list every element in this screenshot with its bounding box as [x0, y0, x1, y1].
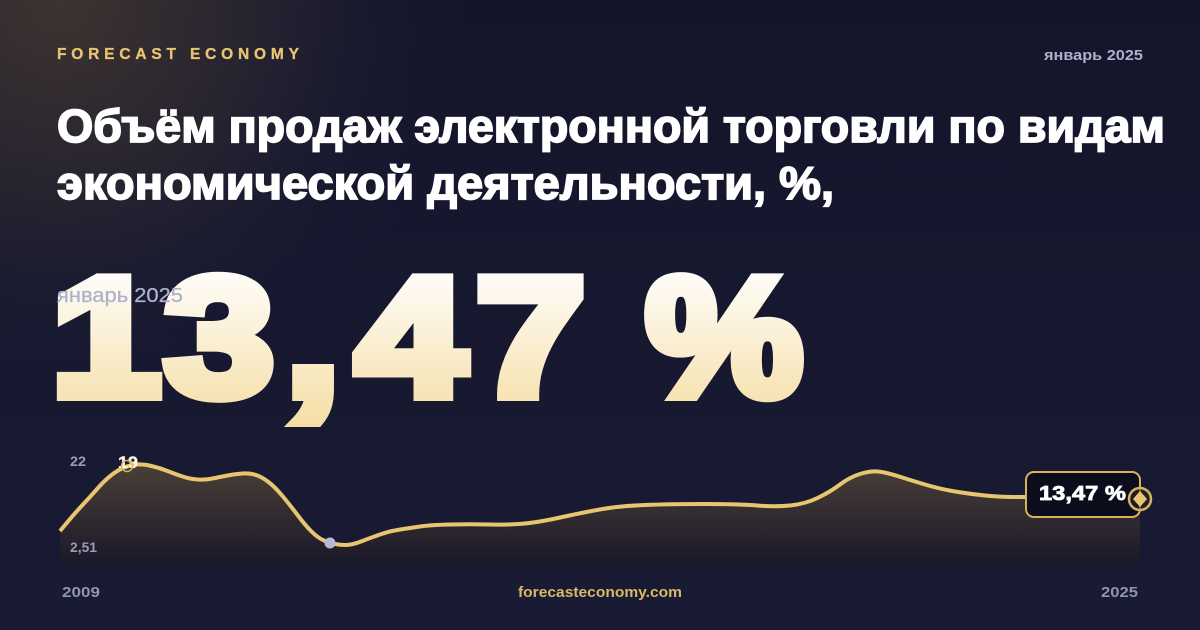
website: forecasteconomy.com [518, 585, 682, 601]
title: экономической деятельности, %, [57, 157, 834, 209]
date under title: январь 2025 [57, 285, 183, 307]
callout [1026, 472, 1140, 517]
title [57, 100, 1165, 209]
area under line [60, 464, 1140, 565]
end year: 2025 [1101, 585, 1138, 601]
start year: 2009 [62, 585, 100, 601]
line chart [60, 453, 1151, 565]
peak value: 19 [118, 453, 138, 472]
big value: % [646, 244, 802, 431]
peak marker [122, 460, 132, 472]
data line [60, 464, 1040, 545]
end marker [1129, 488, 1151, 510]
max label: 22 [70, 454, 86, 469]
big value: 13,47 [51, 242, 585, 431]
callout: 13,47 % [1039, 482, 1126, 505]
brand label: FORECAST ECONOMY [57, 46, 300, 63]
date top right: январь 2025 [1044, 48, 1143, 64]
minimum marker [324, 538, 336, 548]
min label: 2,51 [70, 540, 97, 555]
title: Объём продаж электронной торговли по видам [57, 100, 1165, 152]
